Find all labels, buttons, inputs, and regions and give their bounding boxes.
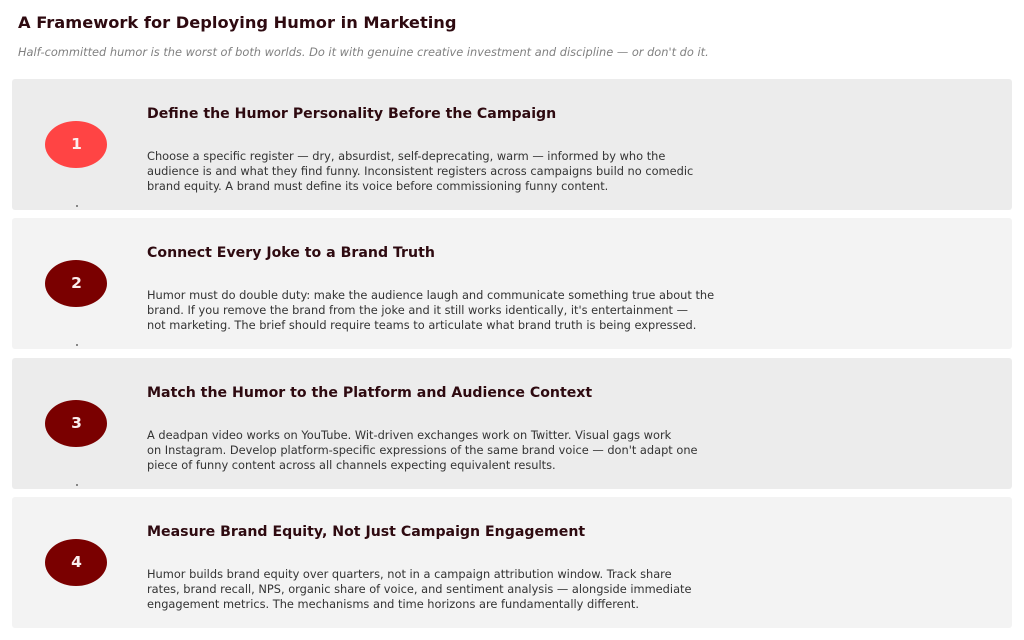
panel: step 1: [12, 79, 1012, 210]
icon: number badge 3: [45, 400, 107, 447]
step 3 body text: on Instagram. Develop platform-specific expressions of the same brand voice — don't adapt one: [147, 443, 698, 457]
step 1 connector dot: [76, 204, 78, 206]
step 1 body text: [147, 149, 693, 193]
step 1 body text: audience is and what they find funny. Inconsistent registers across campaigns build no comedic: [147, 164, 693, 178]
step 3 body text: A deadpan video works on YouTube. Wit-driven exchanges work on Twitter. Visual gags work: [147, 428, 671, 442]
step 2 body text: brand. If you remove the brand from the joke and it still works identically, it's entertainment —: [147, 303, 688, 317]
step 4 body text: rates, brand recall, NPS, organic share of voice, and sentiment analysis — alongside immediate: [147, 582, 692, 596]
icon: number badge 2: [45, 260, 107, 307]
step 1 heading: Define the Humor Personality Before the Campaign: [147, 106, 556, 122]
icon: number badge 4: [45, 539, 107, 586]
step 2 body text: Humor must do double duty: make the audience laugh and communicate something true about the: [147, 288, 714, 302]
step 3 heading: Match the Humor to the Platform and Audience Context: [147, 385, 592, 401]
panel: step 3: [12, 358, 1012, 489]
panel: step 4: [12, 497, 1012, 628]
step 1 body text: Choose a specific register — dry, absurdist, self-deprecating, warm — informed by who the: [147, 149, 665, 163]
step 3 body text: [147, 428, 698, 472]
step 3 body text: piece of funny content across all channels expecting equivalent results.: [147, 458, 556, 472]
panel: step 2: [12, 218, 1012, 349]
step 4 body text: [147, 567, 692, 611]
icon: number badge 1: [45, 121, 107, 168]
icon: number badge 4: 4: [71, 553, 82, 571]
step 2 connector dot: [76, 344, 78, 346]
step 2 body text: [147, 288, 714, 332]
icon: number badge 3: 3: [71, 414, 82, 432]
subtitle: Half-committed humor is the worst of both worlds. Do it with genuine creative investment and discipline — or don't do it.: [18, 45, 709, 59]
icon: number badge 1: 1: [71, 135, 82, 153]
step 1 body text: brand equity. A brand must define its voice before commissioning funny content.: [147, 179, 608, 193]
title: A Framework for Deploying Humor in Marketing: [18, 13, 456, 32]
icon: number badge 2: 2: [71, 274, 82, 292]
step 4 body text: Humor builds brand equity over quarters, not in a campaign attribution window. Track share: [147, 567, 672, 581]
step 2 heading: Connect Every Joke to a Brand Truth: [147, 245, 435, 261]
step 3 connector dot: [76, 484, 78, 486]
step 4 heading: Measure Brand Equity, Not Just Campaign Engagement: [147, 524, 585, 540]
step 2 body text: not marketing. The brief should require teams to articulate what brand truth is being expressed.: [147, 318, 696, 332]
step 4 body text: engagement metrics. The mechanisms and time horizons are fundamentally different.: [147, 597, 639, 611]
